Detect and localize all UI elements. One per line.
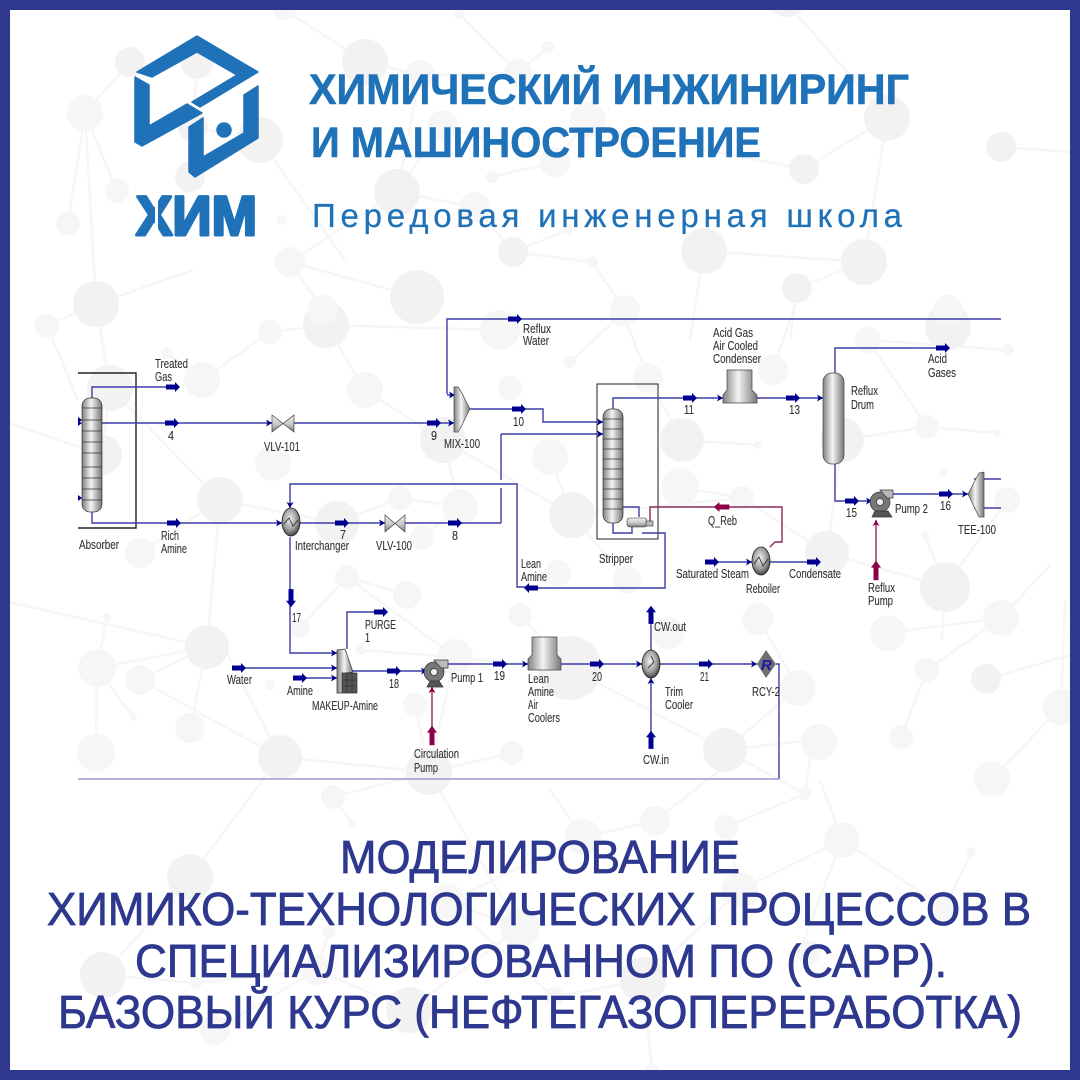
stream lines <box>78 319 1001 779</box>
title: БАЗОВЫЙ КУРС (НЕФТЕГАЗОПЕРЕРАБОТКА) <box>58 986 1022 1038</box>
stream and equipment labels: 19 <box>494 668 505 683</box>
stream and equipment labels: Air <box>528 697 538 712</box>
stream and equipment labels: Reflux <box>868 580 895 595</box>
header: organisation name <box>309 65 909 167</box>
equipment: acid gas air cooler <box>723 370 757 403</box>
stream and equipment labels: Q_Reb <box>708 513 737 528</box>
stream and equipment labels: Water <box>523 333 549 348</box>
logo: cube emblem <box>135 36 258 177</box>
stream and equipment labels: Saturated Steam <box>676 566 749 581</box>
stream and equipment labels: Cooler <box>665 697 693 712</box>
title: СПЕЦИАЛИЗИРОВАННОМ ПО (САРР). <box>135 935 947 987</box>
stream and equipment labels: Reflux <box>851 383 878 398</box>
equipment: stripper column <box>603 409 623 523</box>
equipment: TEE-100 <box>968 472 984 517</box>
header: organisation name: И МАШИНОСТРОЕНИЕ <box>311 119 761 167</box>
stream and equipment labels: Trim <box>665 684 683 699</box>
equipment: recycle RCY-2: R <box>761 657 772 674</box>
stream and equipment labels: 13 <box>789 402 800 417</box>
stream and equipment labels: Amine <box>287 683 313 698</box>
stream and equipment labels: 4 <box>168 428 174 443</box>
stream and equipment labels: Air Cooled <box>713 338 758 353</box>
stream and equipment labels: Absorber <box>79 537 120 552</box>
stream and equipment labels: Gas <box>155 369 172 384</box>
stream and equipment labels <box>79 321 996 775</box>
stream and equipment labels: Amine <box>521 569 547 584</box>
stream and equipment labels: CW.out <box>654 619 686 634</box>
equipment: stripper reboiler <box>627 518 653 527</box>
stream and equipment labels: Pump <box>868 593 893 608</box>
stream and equipment labels: Water <box>227 672 252 687</box>
stream and equipment labels: Interchanger <box>295 538 349 553</box>
equipment: lean amine air cooler <box>528 637 561 670</box>
stream and equipment labels: 20 <box>592 669 602 684</box>
header: subtitle: Передовая инженерная школа <box>312 197 903 234</box>
equipment: reflux drum <box>823 373 844 464</box>
stream and equipment labels: VLV-100 <box>376 538 412 553</box>
stream and equipment labels: 21 <box>700 669 709 684</box>
stream and equipment labels: 8 <box>452 528 458 543</box>
stream and equipment labels: Coolers <box>528 710 560 725</box>
stream and equipment labels: Reboiler <box>746 581 780 596</box>
process flow diagram <box>78 314 1001 779</box>
stream and equipment labels: Acid Gas <box>713 325 753 340</box>
stream arrows <box>78 314 968 749</box>
title: МОДЕЛИРОВАНИЕ <box>340 831 740 883</box>
stream and equipment labels: 9 <box>431 428 437 443</box>
title: ХИМИКО-ТЕХНОЛОГИЧЕСКИХ ПРОЦЕССОВ В <box>47 883 1031 935</box>
stream and equipment labels: Rich <box>161 528 179 543</box>
stream and equipment labels: Lean <box>528 671 549 686</box>
title <box>47 831 1031 1038</box>
stream and equipment labels: MAKEUP-Amine <box>312 698 378 713</box>
stream and equipment labels: TEE-100 <box>958 522 996 537</box>
stream and equipment labels: 15 <box>846 505 857 520</box>
stream and equipment labels: CW.in <box>643 752 669 767</box>
stream and equipment labels: Pump 2 <box>895 501 928 516</box>
stream and equipment labels: 10 <box>513 414 524 429</box>
stream and equipment labels: Pump <box>414 760 438 775</box>
stream and equipment labels: 11 <box>684 402 694 417</box>
stream and equipment labels: Drum <box>851 397 874 412</box>
equipment: recycle RCY-2 <box>757 650 776 678</box>
stream and equipment labels: 7 <box>340 527 346 542</box>
stream and equipment labels: Pump 1 <box>451 670 483 685</box>
stream and equipment labels: 1 <box>365 630 370 645</box>
energy arrows <box>427 502 881 745</box>
stream and equipment labels: Condenser <box>713 351 761 366</box>
equipment: heat exchangers <box>282 508 770 678</box>
equipment: valves <box>272 415 405 532</box>
stream and equipment labels: 17 <box>292 610 301 625</box>
stream and equipment labels: Acid <box>928 351 947 366</box>
stream and equipment labels: Condensate <box>789 566 841 581</box>
equipment: absorber column <box>82 398 102 512</box>
stream and equipment labels: Gases <box>928 365 956 380</box>
stream and equipment labels: Reflux <box>523 321 551 336</box>
stream and equipment labels: 18 <box>389 676 399 691</box>
stream and equipment labels: Amine <box>528 684 554 699</box>
stream and equipment labels: 16 <box>940 498 951 513</box>
stream and equipment labels: Amine <box>161 541 187 556</box>
equipment: makeup mixer <box>337 649 357 693</box>
stream and equipment labels: PURGE <box>365 617 396 632</box>
logo: wordmark: ХИМ <box>136 184 257 247</box>
stream and equipment labels: Lean <box>521 556 541 571</box>
header: organisation name: ХИМИЧЕСКИЙ ИНЖИНИРИНГ <box>309 65 909 114</box>
equipment: mixer MIX-100 <box>454 387 470 432</box>
stream and equipment labels: Circulation <box>414 746 459 761</box>
stream and equipment labels: Treated <box>155 356 188 371</box>
stream and equipment labels: RCY-2 <box>752 684 780 699</box>
stream and equipment labels: VLV-101 <box>264 439 300 454</box>
stream and equipment labels: Stripper <box>599 551 633 566</box>
stream and equipment labels: MIX-100 <box>444 436 480 451</box>
equipment: pumps <box>424 490 893 687</box>
